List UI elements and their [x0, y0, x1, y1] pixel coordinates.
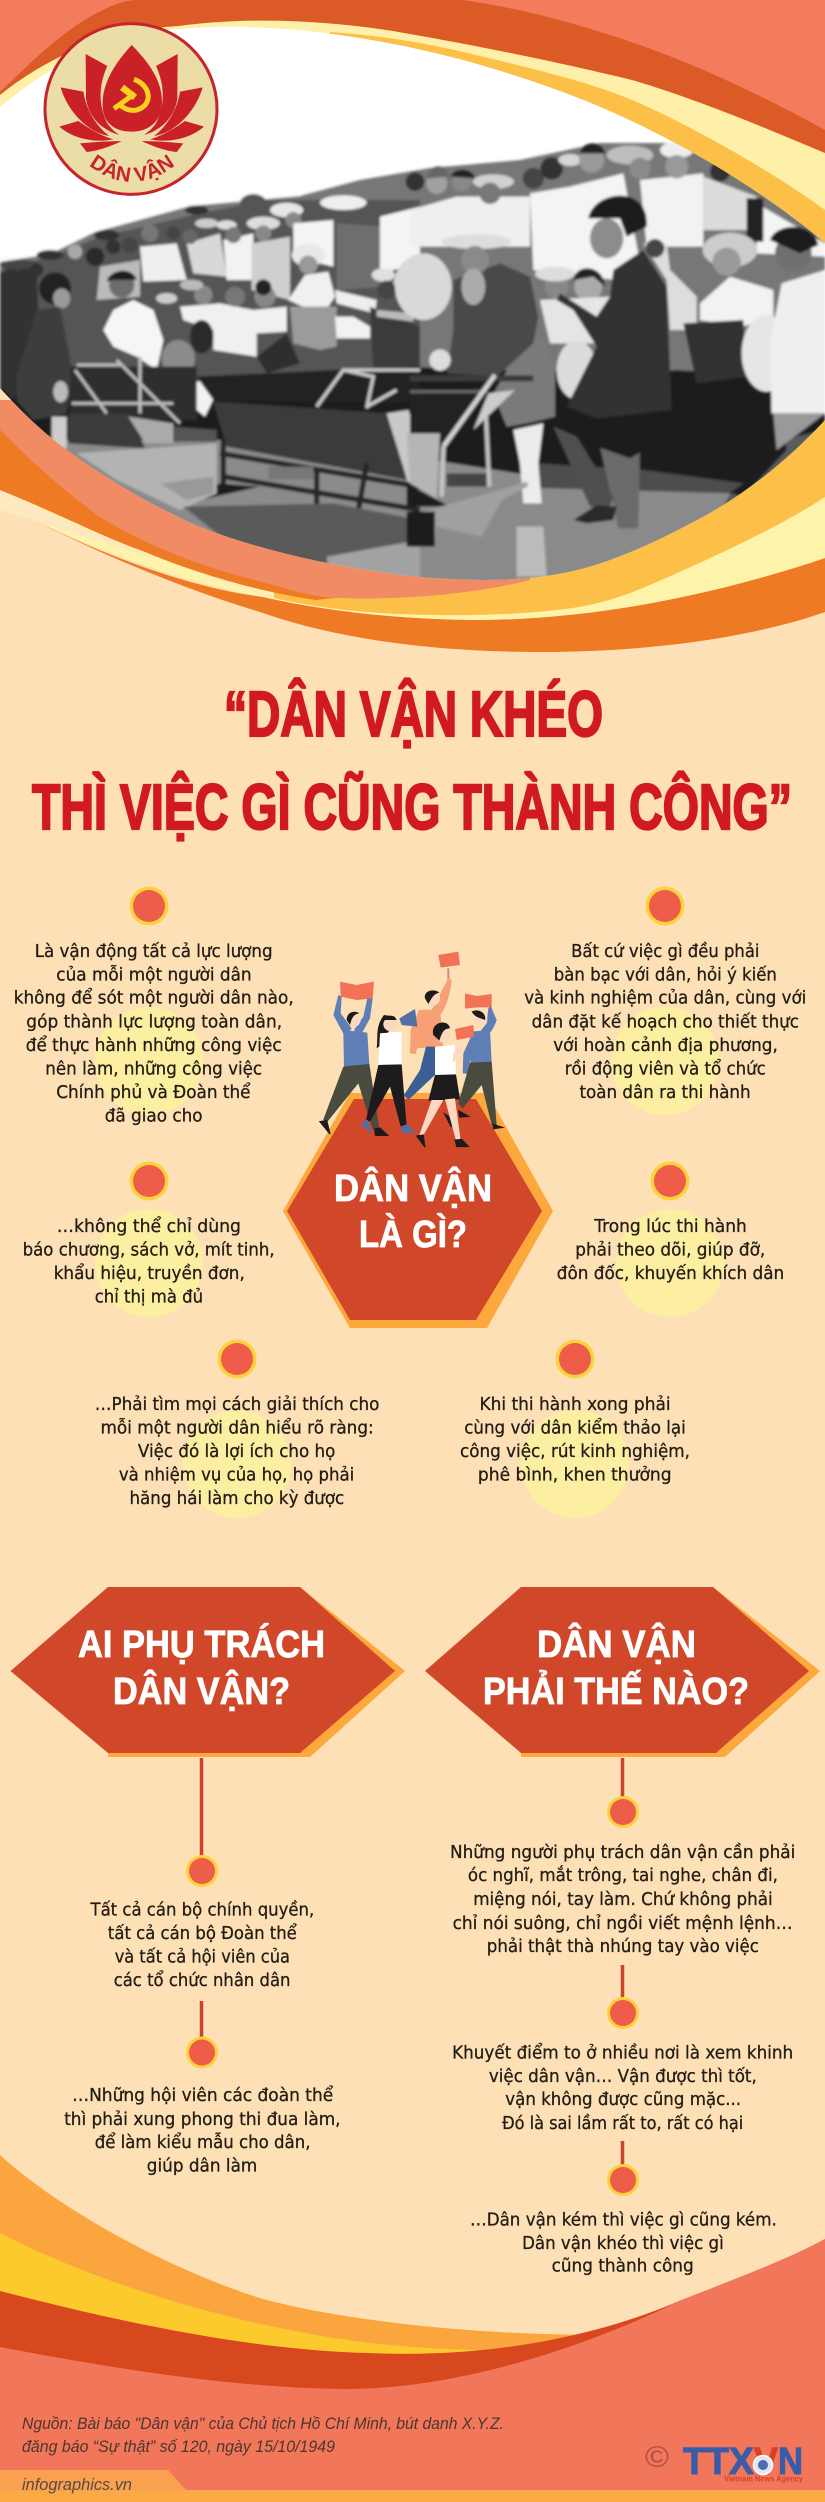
- text block: left 2: chỉ thị mà đủ: [95, 1288, 203, 1308]
- man in white shirt: [103, 300, 163, 370]
- text block: right 3: công việc, rút kinh nghiệm,: [460, 1442, 690, 1462]
- text block: association members: để làm kiểu mẫu cho dân,: [95, 2132, 310, 2153]
- logo: TTXVN: ©: [645, 2441, 669, 2474]
- gold swoosh: [274, 400, 825, 615]
- decorative pale yellow circles behind text: [95, 1007, 724, 1518]
- source note: Nguồn: Bài báo "Dân vận" của Chủ tịch Hồ Chí Minh, bút danh X.Y.Z.: [22, 2414, 504, 2433]
- text block: who is responsible: tất cả cán bộ Đoàn thể: [108, 1923, 297, 1944]
- text block: left 3: Việc đó là lợi ích cho họ: [138, 1442, 335, 1462]
- header: curved bands and photo: [0, 0, 825, 652]
- text block: right 1: bàn bạc với dân, hỏi ý kiến: [554, 964, 777, 986]
- timeline connectors and dots: [186, 1758, 639, 2196]
- machine handle: [410, 375, 533, 497]
- text block: how to do it 2: Khuyết điểm to ở nhiều nơi là xem khinh: [452, 2042, 793, 2064]
- text block: left 3: …Phải tìm mọi cách giải thích cho: [95, 1395, 379, 1415]
- source note: [22, 2414, 504, 2456]
- text block: left 3: hăng hái làm cho kỳ được: [130, 1489, 344, 1509]
- text block: how to do it 2: Đó là sai lầm rất to, rất có hại: [502, 2113, 743, 2134]
- text block: left 1: góp thành lực lượng toàn dân,: [26, 1012, 282, 1032]
- text block: how to do it 2: [452, 2042, 793, 2134]
- text block: right 1: [524, 941, 806, 1103]
- logo: TTXVN: [645, 2441, 803, 2484]
- footer curves: [0, 2155, 825, 2502]
- standing woman: [0, 267, 40, 400]
- text block: left 1: đã giao cho: [105, 1106, 203, 1126]
- text block: left 3: [95, 1395, 379, 1509]
- banner: Ai phụ trách dân vận: DÂN VẬN?: [113, 1669, 290, 1713]
- logo: TTXVN: N: [778, 2441, 803, 2483]
- big trough: [213, 402, 407, 480]
- text block: right 2: phải theo dõi, giúp đỡ,: [575, 1240, 765, 1260]
- title: “DÂN VẬN KHÉO: [224, 677, 603, 750]
- text block: left 2: …không thể chỉ dùng: [57, 1216, 241, 1237]
- text block: how to do it 1: [450, 1842, 795, 1957]
- text block: how to do it 3: …Dân vận kém thì việc gì cũng kém.: [470, 2210, 777, 2230]
- text block: left 1: Là vận động tất cả lực lượng: [35, 941, 273, 962]
- historical photo: [0, 0, 825, 600]
- muddy water: [64, 438, 524, 580]
- text block: association members: thì phải xung phong thi đua làm,: [64, 2110, 340, 2130]
- lotus petals: [59, 45, 204, 152]
- bottom orange swoosh: [0, 503, 825, 652]
- text block: left 2: khẩu hiệu, truyền đơn,: [54, 1263, 245, 1284]
- text block: right 2: Trong lúc thi hành: [593, 1217, 747, 1237]
- text block: right 1: với hoàn cảnh địa phương,: [553, 1036, 778, 1056]
- right half of photo: [395, 142, 825, 580]
- text block: right 1: toàn dân ra thi hành: [580, 1083, 751, 1103]
- text block: how to do it 2: vận không được cũng mặc...: [505, 2090, 741, 2110]
- text block: right 2: đôn đốc, khuyến khích dân: [557, 1263, 784, 1284]
- text block: who is responsible: các tổ chức nhân dân: [114, 1970, 290, 1991]
- text block: left 1: nên làm, những công việc: [45, 1060, 262, 1080]
- text block: right 1: và kinh nghiệm của dân, cùng với: [524, 988, 806, 1008]
- hexagon: Dân vận là gì: [283, 1093, 553, 1328]
- hexagon: Dân vận là gì: LÀ GÌ?: [359, 1212, 467, 1256]
- text block: right 1: Bất cứ việc gì đều phải: [571, 941, 760, 962]
- gold top band: [330, 32, 825, 320]
- text block: right 3: [460, 1395, 690, 1486]
- text block: who is responsible: và tất cả hội viên của: [115, 1946, 290, 1967]
- text block: how to do it 3: cũng thành công: [552, 2257, 694, 2277]
- left transplanter: [70, 367, 197, 420]
- emblem label: DÂN VẬN: [90, 154, 174, 182]
- text block: right 3: phê bình, khen thưởng: [478, 1466, 672, 1486]
- text block: left 1: Chính phủ và Đoàn thể: [56, 1082, 251, 1103]
- text block: right 3: cùng với dân kiểm thảo lại: [464, 1418, 686, 1438]
- seated row: [180, 303, 287, 357]
- person 5: blue top with flag: [446, 993, 505, 1129]
- banner: Ai phụ trách dân vận: AI PHỤ TRÁCH: [78, 1622, 325, 1666]
- person 4: front woman in skirt: [417, 1023, 474, 1147]
- young man in dark shirt: [600, 447, 640, 528]
- dark orange band: [0, 0, 825, 320]
- person 2: woman with megaphone: [362, 1009, 417, 1133]
- banner: Ai phụ trách dân vận: [10, 1587, 405, 1757]
- seated man with hat: [700, 277, 773, 327]
- mid orange swoosh: [0, 400, 400, 600]
- text block: left 2: [23, 1216, 275, 1308]
- text block: left 1: [14, 941, 294, 1126]
- person 1: blue sweater with flag: [320, 982, 389, 1136]
- text block: right 1: dân đặt kế hoạch cho thiết thực: [532, 1012, 799, 1032]
- text block: left 2: báo chương, sách vở, mít tinh,: [23, 1240, 275, 1260]
- text block: association members: [64, 2085, 340, 2176]
- text block: left 1: của mỗi một người dân: [56, 964, 252, 986]
- text block: left 1: để thực hành những công việc: [26, 1035, 282, 1056]
- banner: Dân vận phải thế nào: [425, 1587, 820, 1757]
- water highlights: [77, 443, 217, 510]
- text block: how to do it 1: óc nghĩ, mắt trông, tai nghe, chân đi,: [468, 1865, 778, 1886]
- text block: left 1: không để sót một người dân nào,: [14, 988, 294, 1008]
- title: [32, 677, 792, 843]
- hammer and sickle: [114, 79, 148, 110]
- illustration: group of campaigners: [320, 952, 505, 1147]
- Uncle Ho: [493, 368, 558, 428]
- text block: who is responsible: [90, 1900, 314, 1991]
- text block: how to do it 1: miệng nói, tay làm. Chứ không phải: [473, 1890, 773, 1910]
- text block: how to do it 3: [470, 2210, 777, 2277]
- person 3: orange sweater with placard: [404, 952, 460, 1100]
- top coral corner: [0, 0, 825, 320]
- dots: section one: [130, 886, 690, 1378]
- earth patch: [196, 369, 421, 401]
- banner: Dân vận phải thế nào: DÂN VẬN: [537, 1622, 696, 1666]
- text block: right 3: Khi thi hành xong phải: [480, 1395, 671, 1415]
- crowd mass: [0, 141, 825, 373]
- text block: left 3: mỗi một người dân hiểu rõ ràng:: [100, 1418, 374, 1438]
- text block: right 1: rồi động viên và tổ chức: [565, 1058, 766, 1080]
- peach swoosh: [0, 400, 530, 598]
- text block: how to do it 1: Những người phụ trách dân vận cần phải: [450, 1842, 795, 1863]
- source note: đăng báo “Sự thật” số 120, ngày 15/10/1949: [22, 2437, 336, 2456]
- pale yellow top band: [0, 21, 825, 320]
- text block: left 3: và nhiệm vụ của họ, họ phải: [119, 1466, 354, 1486]
- text block: how to do it 1: phải thật thà nhúng tay vào việc: [487, 1937, 759, 1957]
- left half of photo: [0, 194, 420, 577]
- text block: right 2: [557, 1217, 784, 1284]
- text block: how to do it 1: chỉ nói suông, chỉ ngồi viết mệnh lệnh…: [453, 1913, 793, 1934]
- conical hat held by Ho: [395, 253, 452, 320]
- logo: TTXVN: V: [754, 2441, 779, 2483]
- right man in white: [770, 270, 825, 413]
- dark earth behind men: [649, 368, 788, 496]
- text block: association members: …Những hội viên các đoàn thể: [72, 2085, 333, 2106]
- text block: how to do it 2: việc dân vận… Vận được thì tốt,: [489, 2066, 757, 2087]
- frame: [317, 370, 420, 408]
- pale yellow swoosh: [0, 400, 825, 620]
- emblem: Dân Vận lotus badge: [44, 22, 218, 196]
- logo: TTXVN: Vietnam News Agency: [724, 2474, 803, 2484]
- website credit: infographics.vn: [22, 2475, 132, 2494]
- logo: TTXVN: TTX: [683, 2441, 755, 2483]
- dark earth: [0, 366, 825, 476]
- hexagon: Dân vận là gì: DÂN VẬN: [334, 1166, 492, 1210]
- text block: how to do it 3: Dân vận khéo thì việc gì: [522, 2234, 724, 2254]
- banner: Dân vận phải thế nào: PHẢI THẾ NÀO?: [483, 1669, 749, 1713]
- text block: who is responsible: Tất cả cán bộ chính quyền,: [90, 1900, 314, 1921]
- text block: association members: giúp dân làm: [147, 2156, 257, 2176]
